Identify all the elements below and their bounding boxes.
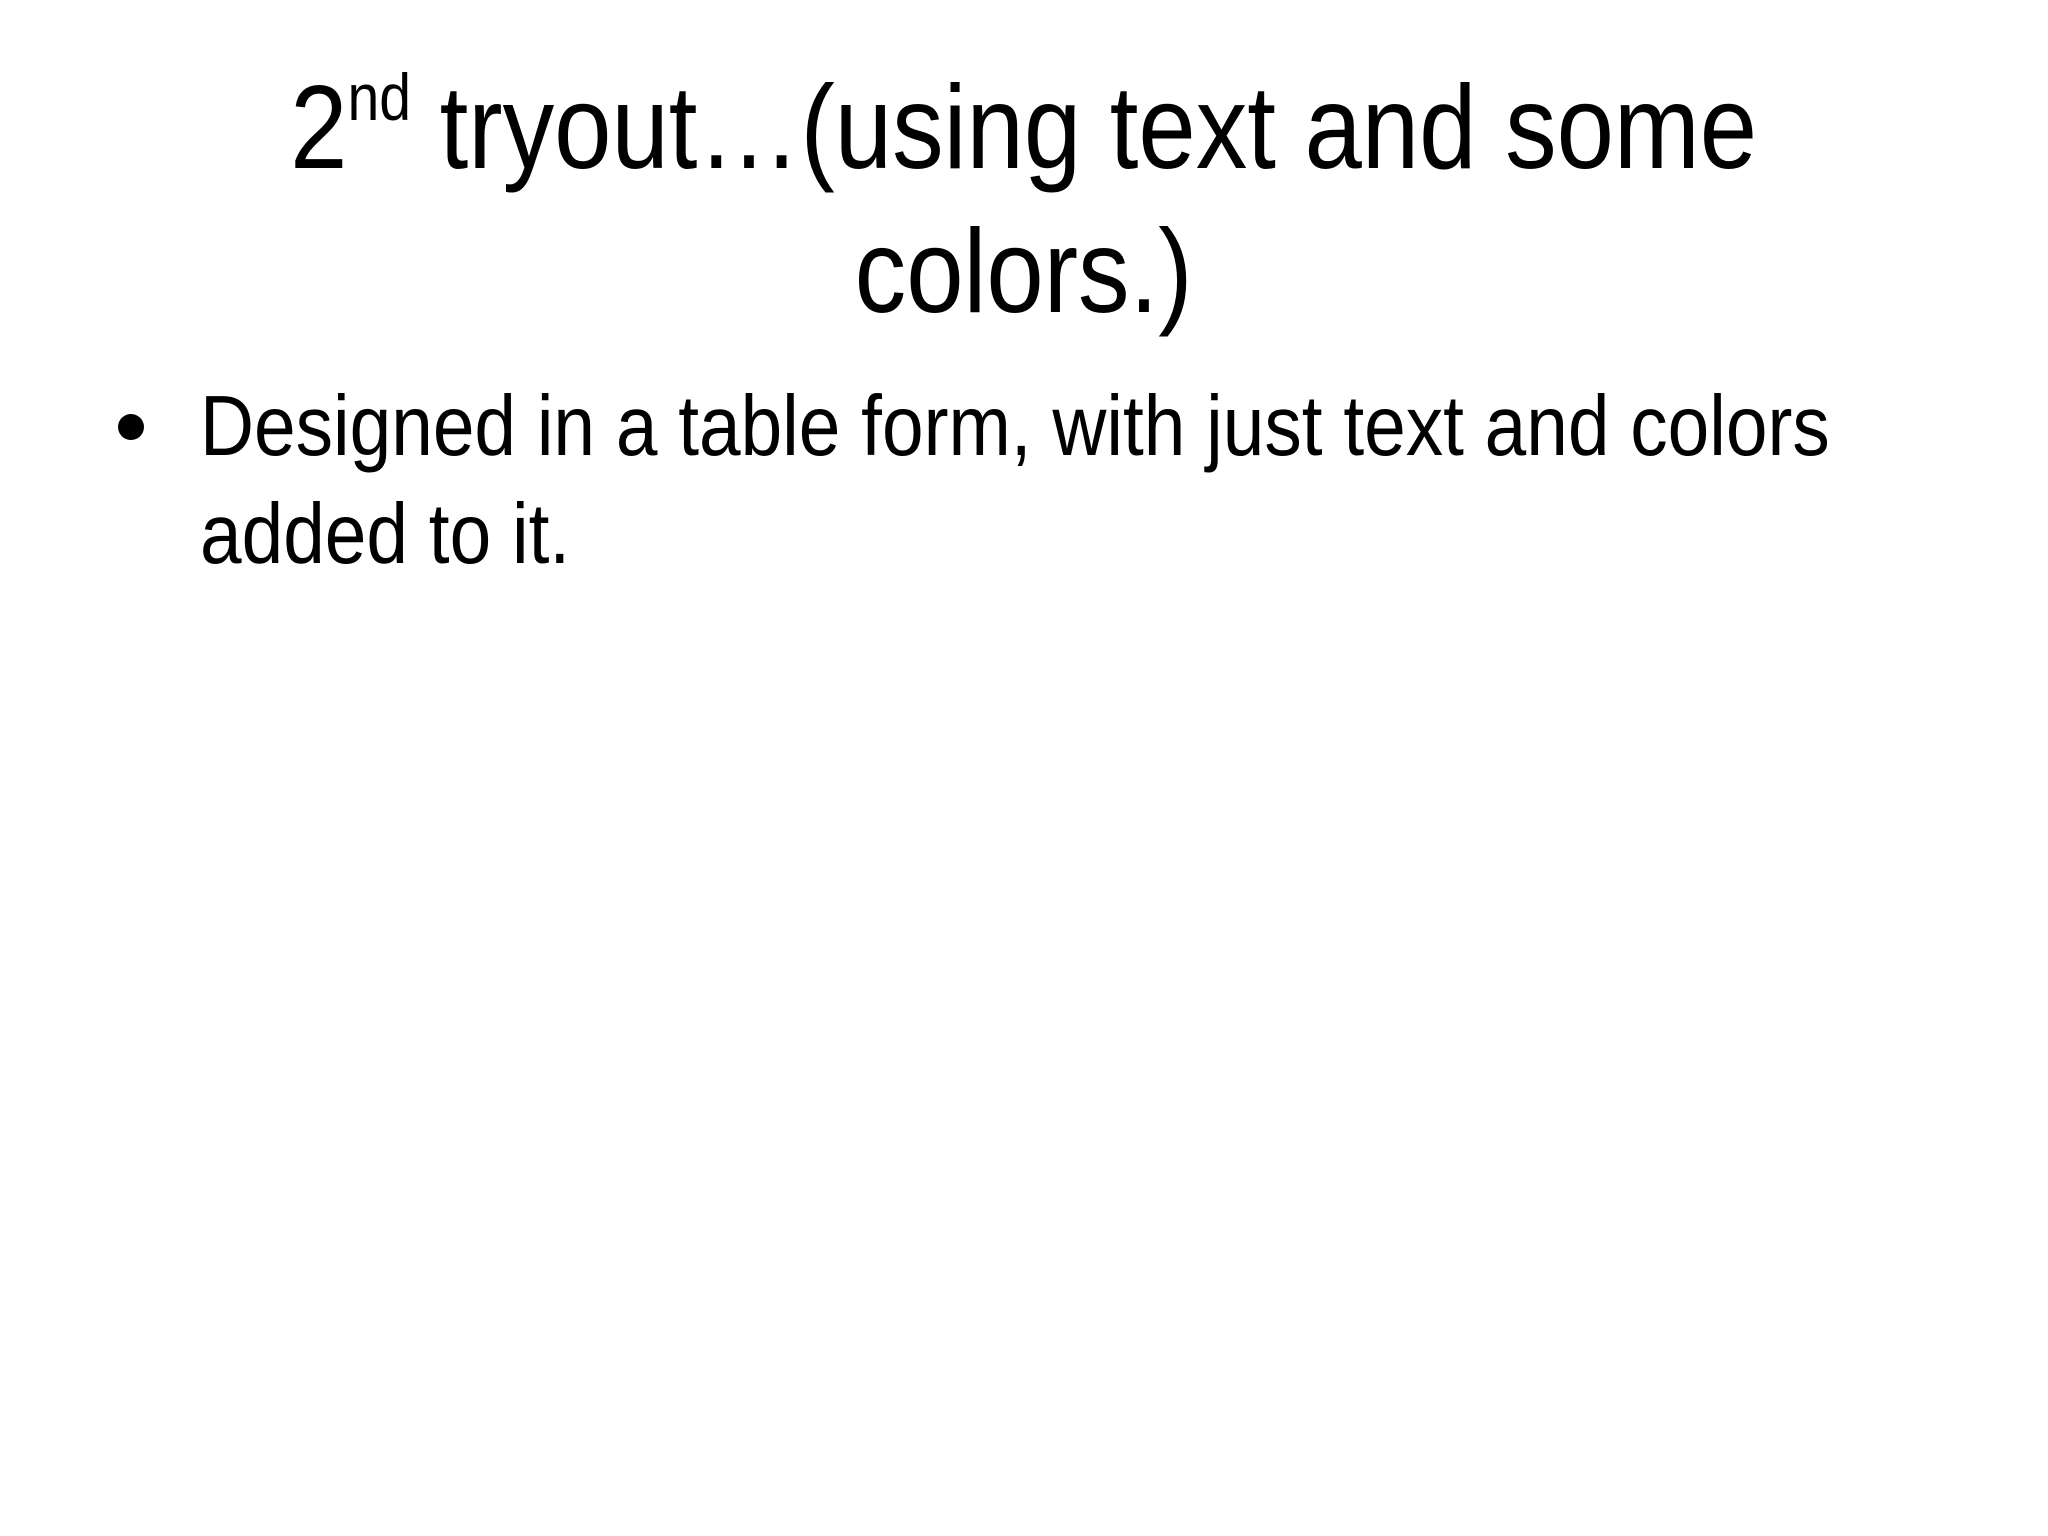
title line 2: colors.) [855, 205, 1193, 338]
bullet marker [118, 414, 144, 440]
bullet text block [118, 379, 1830, 582]
title [290, 60, 1757, 338]
bullet line 1: Designed in a table form, with just text and colors [200, 379, 1830, 474]
title line 1: 2nd tryout…(using text and some [290, 60, 1757, 194]
bullet line 2: added to it. [200, 487, 570, 582]
